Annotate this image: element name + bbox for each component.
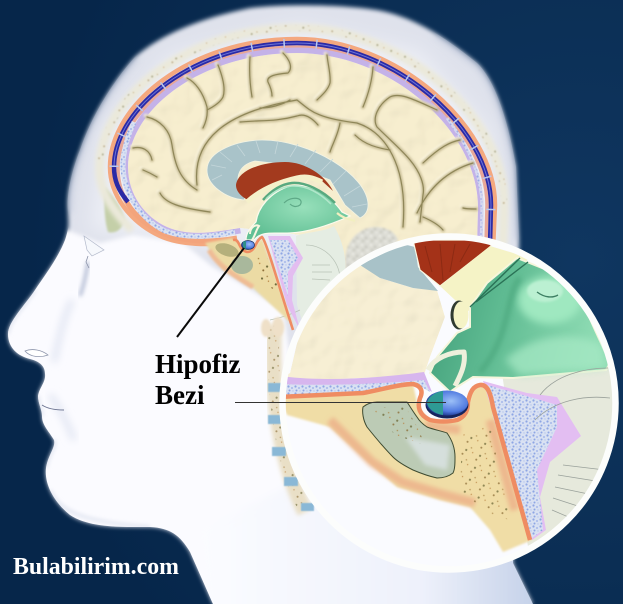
- label: Hipofiz Bezi: Bezi: [155, 380, 205, 410]
- inset: right lilac membrane: [483, 381, 581, 540]
- sphenoid bone region: [205, 238, 293, 325]
- leader line to small pituitary: [177, 248, 244, 337]
- inset: green highlights: [470, 258, 606, 375]
- corpus callosum: [207, 140, 368, 218]
- inset: red body: [413, 240, 495, 286]
- cerebrum: [128, 52, 478, 300]
- inset: brainstem arcs and striations: [535, 368, 610, 522]
- small pituitary gland: [242, 240, 254, 250]
- inset: orange dura line: [280, 384, 530, 540]
- magnified circle inset: [280, 236, 623, 570]
- cerebellum: [345, 227, 398, 290]
- thalamus green: [246, 183, 355, 240]
- frontal sinus: [104, 187, 125, 232]
- inset: stem background: [503, 368, 612, 546]
- inset: large green region: [430, 258, 610, 392]
- face shading and features: [25, 236, 104, 440]
- inset: bone: [280, 384, 532, 552]
- brain folds: [132, 52, 476, 230]
- label: Hipofiz Bezi: Hipofiz: [155, 349, 241, 379]
- inset: small cream oval: [450, 300, 468, 330]
- leader line to magnified pituitary: [235, 402, 446, 404]
- spine: [261, 317, 314, 512]
- orange skull line: [110, 39, 495, 250]
- salmon layer: [118, 47, 487, 245]
- brainstem: [270, 226, 345, 330]
- skull and meninges layers: [110, 39, 495, 250]
- clivus marrow: [233, 236, 303, 330]
- inset: lilac band: [287, 372, 432, 392]
- inset: speckled clivus: [487, 385, 557, 538]
- fornix red body: [236, 162, 333, 200]
- lilac layer: [128, 53, 478, 250]
- inset: pale loop of the stalk: [428, 352, 464, 386]
- inset: sinus cavity: [363, 402, 455, 478]
- watermark: Bulabilirim.com: [13, 554, 179, 580]
- inset: corpus callosum: [360, 244, 438, 291]
- inset: pituitary gland: [426, 390, 468, 418]
- inset: cerebrum: [288, 266, 445, 379]
- inset: cream band: [440, 246, 530, 312]
- inset: speckled band: [286, 380, 430, 394]
- outer skull bone: [100, 28, 504, 245]
- cream band: [247, 177, 322, 202]
- white ring of inset: [282, 236, 616, 570]
- dark blue sinus: [114, 43, 491, 245]
